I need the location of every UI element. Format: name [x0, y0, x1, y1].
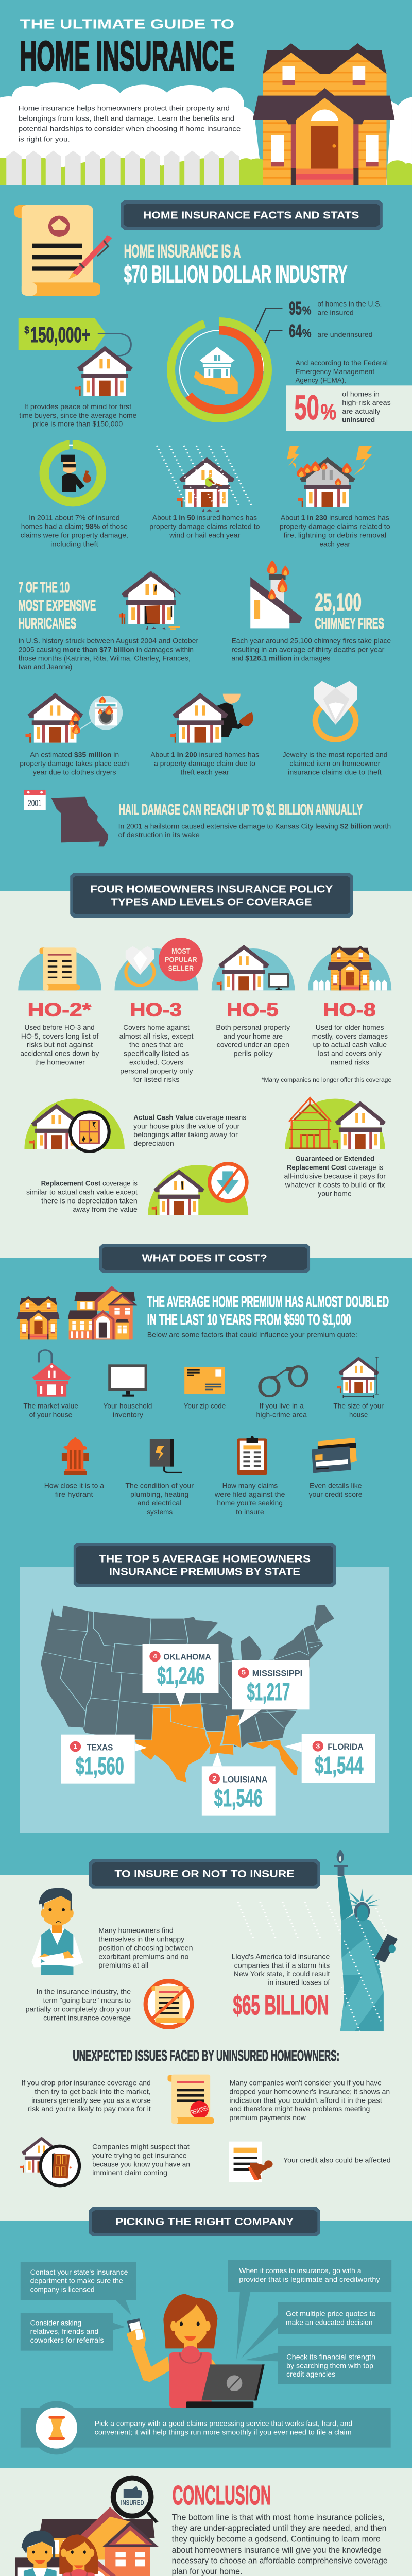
callout: consider asking relatives: Consider asking — [30, 2319, 81, 2327]
text: HO-5 description: Both personal property — [216, 1024, 290, 1031]
icon: guaranteed replacement, frame and finished house — [285, 1097, 386, 1149]
text: hurricanes details: those months (Katrina, Rita, Wilma, Charley, Frances, — [19, 654, 191, 662]
icon: house price tag — [32, 1350, 71, 1397]
caption: house size — [333, 1402, 384, 1418]
text: conclusion body — [172, 2513, 388, 2576]
callout: florida — [284, 1734, 375, 1783]
icon: house with burning dryer — [25, 693, 123, 743]
icon: house with dimensions — [337, 1357, 379, 1398]
text: HO-5 description: covered under an open — [217, 1041, 289, 1049]
fema text — [295, 359, 388, 384]
icon: calendar 2001 — [24, 790, 46, 810]
text: going bare: current insurance coverage — [43, 2014, 131, 2022]
caption: theft claims — [150, 751, 259, 776]
callout: texas: TEXAS — [87, 1743, 113, 1752]
callout: contact state department — [21, 2262, 136, 2315]
price tag and house: $ — [24, 325, 29, 336]
icon: magnifier insured thumbs up — [111, 2476, 157, 2522]
panel: map background — [20, 1567, 389, 1833]
text: lloyds america: Lloyd's America told insurance — [231, 1953, 330, 1960]
text: HO-2 description: HO-5, covers long list of — [21, 1032, 99, 1040]
text: hurricanes details: Ivan and Jeanne) — [19, 663, 72, 671]
caption: high crime: If you live in a — [260, 1402, 304, 1410]
callout: 50% uninsured: of homes in — [342, 390, 380, 398]
text: hurricanes details: 2005 causing more than $77 billion in damages within — [19, 646, 194, 653]
icon: storm dots and statue of liberty — [238, 1850, 398, 2031]
callout: consider asking relatives: relatives, friends and — [30, 2328, 98, 2335]
text: kansas city hailstorm: of destruction in its wake — [118, 831, 200, 839]
text: going bare: partially or completely drop your — [25, 2005, 131, 2013]
callout: financial strength: credit agencies — [286, 2370, 335, 2378]
callout: financial strength — [244, 2346, 391, 2384]
text: HO-2 description — [20, 1024, 99, 1066]
text: HO-3 description: personal property only — [120, 1067, 193, 1075]
icon: HO-3 diamond ring, most popular seller: SELLER — [168, 964, 194, 973]
caption: zip code: Your zip code — [184, 1402, 226, 1410]
icon: electrical panel — [150, 1439, 182, 1472]
icon: handcuffs — [260, 1366, 306, 1396]
icon: monitor — [108, 1364, 147, 1397]
heading: HO-2: HO-2* — [28, 999, 91, 1021]
caption: burglary claims: including theft — [50, 540, 98, 548]
callout: multiple price quotes — [241, 2302, 391, 2359]
callout: mississippi: 5 — [242, 1668, 246, 1676]
callout: 50% uninsured: 50 — [294, 388, 319, 427]
text: HO-3 description — [119, 1024, 194, 1083]
caption: household inventory — [104, 1402, 152, 1418]
text: unhappy position: themselves in the unhappy — [98, 1935, 184, 1943]
icon: credit cards — [312, 1438, 357, 1473]
callout: legitimate provider — [228, 2260, 391, 2360]
callout: mississippi: MISSISSIPPI — [252, 1669, 302, 1679]
text: guaranteed replacement cost: your home — [318, 1190, 352, 1197]
caption: high crime — [256, 1402, 307, 1418]
text: actual cash value: belongings after taking away for — [133, 1131, 238, 1139]
caption: peace of mind: time buyers, since the average home — [19, 412, 136, 419]
icon: rejected scroll — [168, 2075, 214, 2124]
text: unhappy position: Many homeowners find — [98, 1926, 174, 1935]
caption: fire hydrant — [44, 1482, 105, 1498]
text: drop prior insurance: insurers generally see you as a worse — [31, 2096, 151, 2104]
icon: scroll crossed out — [144, 1979, 194, 2029]
text: HO-2 description: the homeowner — [35, 1058, 85, 1066]
stat: 64% underinsured: 64 — [289, 321, 302, 341]
stat: 64% underinsured — [258, 321, 372, 359]
stat: 95% of homes insured: % — [302, 304, 312, 317]
banner: top 5 premiums by state — [74, 1543, 336, 1587]
icon: pair of houses — [16, 1286, 137, 1339]
text: lloyds america: in insured losses of — [268, 1978, 330, 1987]
icon: diamond ring — [313, 681, 358, 742]
caption: market value: The market value — [23, 1402, 78, 1410]
icon: hail-damaged house — [157, 446, 252, 512]
caption: plumbing heating electrical: The condition of your — [125, 1482, 194, 1489]
icon: fire hydrant — [62, 1437, 89, 1475]
text: conclusion body: plan for your home. — [172, 2567, 242, 2576]
text: replacement cost: Replacement Cost coverage is — [41, 1179, 138, 1188]
caption: fire or lightning — [280, 514, 390, 548]
banner: picking the right company — [89, 2207, 320, 2236]
text: HO-3 description: the ones that are — [129, 1041, 184, 1049]
icon: unhappy homeowner — [31, 1888, 83, 1975]
text: HO-5 description — [216, 1024, 290, 1058]
text: HO-2 description: Used before HO-3 and — [24, 1024, 95, 1031]
banner: four homeowners insurance policy types: TYPES AND LEVELS OF COVERAGE — [111, 896, 312, 908]
text: replacement cost — [26, 1179, 138, 1213]
text: HO-3 description: Covers home against — [123, 1024, 190, 1031]
text: lloyds america: companies that if a storm hits — [234, 1961, 330, 1969]
text: suspect imminent claim: imminent claim coming — [92, 2169, 167, 2177]
banner: top 5 premiums by state: INSURANCE PREMIUMS BY STATE — [109, 1566, 300, 1578]
text: chimney details — [231, 637, 391, 662]
caption: jewelry — [282, 751, 388, 776]
text: suspect imminent claim — [92, 2143, 190, 2177]
text: replacement cost: there is no depreciation taken — [41, 1197, 138, 1205]
text: HO-3 description: for listed risks — [133, 1076, 179, 1083]
text: going bare — [25, 1988, 131, 2022]
callout: consider asking relatives: coworkers for referrals — [30, 2336, 104, 2344]
caption: claims filed: were filed against the — [214, 1490, 285, 1498]
callout: oklahoma: 4 — [153, 1652, 157, 1660]
icon: HO-5 house and monitor — [212, 945, 295, 990]
stat: 95% of homes insured — [254, 298, 382, 335]
text: guaranteed replacement cost: Replacement Cost coverage is — [287, 1163, 383, 1172]
banner: picking the right company: PICKING THE RIGHT COMPANY — [115, 2216, 294, 2228]
text: hurricanes details: in U.S. history struck between August 2004 and October — [19, 637, 198, 645]
caption: plumbing heating electrical: and electrical — [137, 1499, 182, 1507]
intro paragraph: Home insurance helps homeowners protect their property and — [19, 104, 230, 112]
text: hurricanes details — [19, 637, 198, 671]
icon: hand holding house — [194, 347, 238, 394]
caption: plumbing heating electrical: systems — [147, 1508, 173, 1516]
caption: credit score: Even details like — [310, 1482, 362, 1489]
caption: theft claims: theft each year — [181, 768, 229, 776]
callout: oklahoma: $1,246 — [157, 1662, 204, 1689]
text: lloyds america — [231, 1953, 330, 1987]
caption: plumbing heating electrical: plumbing, heating — [130, 1490, 188, 1498]
callout: contact state department: company is licensed — [30, 2285, 95, 2294]
price tag and house — [19, 318, 133, 396]
illustration: couple in front of new house — [15, 2507, 159, 2576]
text: replacement cost: away from the value — [73, 1206, 138, 1213]
text: actual cash value: Actual Cash Value coverage means — [133, 1113, 246, 1121]
stat: 64% underinsured: % — [302, 327, 312, 340]
map: highlighted states — [134, 1704, 298, 1783]
text: HURRICANES — [19, 615, 76, 632]
icon: envelope zip code — [184, 1367, 225, 1394]
banner: four homeowners insurance policy types: FOUR HOMEOWNERS INSURANCE POLICY — [90, 884, 333, 895]
banner: what does it cost: WHAT DOES IT COST? — [142, 1252, 267, 1264]
caption: peace of mind: It provides peace of mind for first — [24, 403, 131, 411]
caption: credit score: your credit score — [308, 1490, 363, 1498]
text: actual cash value: your house plus the value of your — [133, 1122, 239, 1130]
text: unhappy position: exorbitant premiums and no — [98, 1953, 188, 1960]
text: HO-3 description: specifically listed as — [124, 1049, 189, 1058]
text: MOST EXPENSIVE — [19, 597, 96, 614]
text: HO-2 description: accidental ones down by — [20, 1049, 99, 1058]
icon: hurricane-damaged house — [119, 568, 186, 630]
text: kansas city hailstorm — [118, 822, 391, 839]
icon: HO-2 scroll in dome — [18, 947, 101, 990]
callout: louisiana — [202, 1753, 276, 1816]
text: HO-2 description: risks but not against — [27, 1041, 93, 1049]
icon: missouri map — [51, 797, 108, 846]
text: unhappy position: position of choosing between — [98, 1944, 193, 1952]
icon: contract scroll with pen — [14, 205, 112, 296]
text: replacement cost: similar to actual cash value except — [26, 1188, 138, 1196]
caption: claims filed: to insure — [236, 1508, 264, 1516]
icon: actual cash value house with cracked window — [24, 1099, 125, 1153]
caption: wind or hail: About 1 in 50 insured homes has — [152, 514, 257, 522]
caption: house size: house — [349, 1411, 368, 1418]
caption: house size: The size of your — [333, 1402, 384, 1410]
map: united states — [41, 1605, 334, 1748]
intro paragraph: belongings from loss, theft and damage. Learn the benefits and — [19, 114, 234, 123]
caption: household inventory: inventory — [113, 1411, 143, 1418]
heading: 7 of the 10 most expensive hurricanes — [19, 579, 96, 632]
icon: replacement cost house with no depreciation sign — [148, 1162, 249, 1215]
caption: wind or hail — [149, 514, 260, 539]
callout: 50% uninsured: uninsured — [342, 416, 375, 424]
text: actual cash value: depreciation — [133, 1140, 174, 1147]
icon: magnifier insured thumbs up: INSURED — [121, 2499, 144, 2507]
caption: claims filed: home you're seeking — [217, 1499, 283, 1507]
caption: peace of mind — [19, 403, 136, 428]
caption: fire or lightning: each year — [319, 540, 350, 548]
text: drop prior insurance: then try to get back into the market, — [35, 2088, 151, 2095]
caption: theft claims: a property damage claim due to — [154, 759, 255, 768]
caption: burglary claims: homes had a claim; 98% of those — [21, 522, 128, 531]
caption: credit score — [308, 1482, 363, 1498]
icon: clipboard — [237, 1436, 267, 1475]
callout: mississippi: $1,217 — [247, 1678, 290, 1705]
caption: burglary claims — [21, 514, 128, 548]
text: HO-8 description — [312, 1024, 388, 1066]
caption: burglary claims: In 2011 about 7% of insured — [29, 514, 120, 522]
callout: 50% uninsured: % — [320, 399, 336, 424]
caption: wind or hail: property damage claims related to — [149, 522, 260, 531]
callout: contact state department: Contact your state's insurance — [30, 2268, 128, 2276]
title: the ultimate guide to: THE ULTIMATE GUIDE TO — [20, 17, 234, 32]
text: chimney details: and $126.1 million in damages — [231, 654, 330, 662]
text: HO-5 description: perils policy — [234, 1049, 273, 1058]
caption: plumbing heating electrical — [125, 1482, 194, 1516]
callout: oklahoma — [143, 1644, 218, 1707]
caption: clothes dryers — [20, 751, 129, 776]
text: drop prior insurance: If you drop prior insurance coverage and — [21, 2079, 151, 2087]
text: actual cash value — [133, 1113, 246, 1147]
icon: HO-3 diamond ring, most popular seller: POPULAR — [165, 956, 197, 964]
caption: wind or hail: wind or hail each year — [169, 531, 240, 539]
icon: house on fire with lightning — [287, 446, 372, 507]
caption: claims filed: How many claims — [222, 1482, 278, 1489]
callout: louisiana: 2 — [212, 1774, 216, 1782]
text: REJECTED — [190, 2105, 210, 2116]
caption: clothes dryers: property damage takes place each — [20, 759, 129, 768]
intro paragraph — [19, 104, 241, 143]
text: lloyds america: New York state, it could result — [234, 1970, 330, 1978]
icon: HO-3 diamond ring, most popular seller: MOST — [171, 947, 191, 956]
callout: mississippi — [232, 1660, 310, 1726]
icon: burglar in ring — [40, 439, 106, 506]
callout: florida: FLORIDA — [328, 1742, 364, 1752]
icon: big orange house — [253, 43, 394, 185]
caption: theft claims: About 1 in 200 insured homes has — [150, 751, 259, 759]
donut chart: insured vs underinsured — [164, 314, 275, 426]
price tag and house: 150,000+ — [30, 323, 90, 347]
icon: house and door under magnifier — [20, 2137, 81, 2187]
banner: home insurance facts and stats — [121, 200, 383, 230]
caption: market value — [23, 1402, 78, 1418]
stat: 64% underinsured: are underinsured — [317, 331, 372, 338]
callout: louisiana: LOUISIANA — [222, 1775, 267, 1784]
intro paragraph: potential hardships to consider when choosing if home insurance — [19, 125, 241, 133]
caption: clothes dryers: An estimated $35 million in — [30, 751, 119, 759]
text: HO-5 description: and your home are — [224, 1032, 283, 1040]
text: unhappy position: premiums at all — [98, 1961, 148, 1969]
callout: texas: $1,560 — [76, 1752, 124, 1780]
text: guaranteed replacement cost — [284, 1155, 386, 1197]
icon: calendar 2001: 2001 — [28, 798, 42, 809]
text: unhappy position — [98, 1926, 193, 1969]
caption: market value: of your house — [29, 1411, 72, 1418]
stat: 95% of homes insured: are insured — [317, 309, 354, 316]
text: going bare: In the insurance industry, the — [36, 1988, 131, 1996]
icon: HO-3 diamond ring, most popular seller — [114, 938, 203, 990]
callout: texas — [61, 1735, 147, 1784]
callout: texas: 1 — [73, 1742, 77, 1750]
icon: credit report with stamp — [229, 2142, 273, 2182]
text: companies won't consider: premium payments now — [229, 2114, 306, 2122]
callout: florida: 3 — [316, 1742, 320, 1750]
text: HO-3 description: excluded. Covers — [129, 1058, 183, 1066]
callout: 50% uninsured: are actually — [342, 408, 380, 415]
heading: average premium doubled — [147, 1294, 389, 1329]
banner: four homeowners insurance policy types — [70, 873, 353, 918]
icon: burglar behind house — [170, 693, 253, 743]
caption: claims filed — [214, 1482, 285, 1516]
caption: fire hydrant: fire hydrant — [55, 1490, 93, 1498]
panel: claims processing with hourglass — [21, 2401, 391, 2454]
callout: consider asking relatives — [21, 2313, 125, 2351]
text: companies won't consider — [229, 2079, 390, 2122]
callout: oklahoma: OKLAHOMA — [163, 1652, 211, 1662]
text: drop prior insurance: risk and you're likely to pay more for it — [28, 2105, 151, 2113]
text: drop prior insurance — [21, 2079, 151, 2113]
text: suspect imminent claim: you're trying to get insurance — [92, 2151, 187, 2159]
callout: 50% uninsured — [286, 385, 412, 431]
caption: peace of mind: price is more than $150,000 — [33, 420, 123, 428]
caption: clothes dryers: year due to clothes dryers — [33, 768, 116, 776]
hero scenery: clouds, bushes, fence — [0, 82, 412, 185]
banner: to insure or not to insure: TO INSURE OR NOT TO INSURE — [114, 1869, 294, 1880]
intro paragraph: is right for you. — [19, 135, 70, 143]
caption: high crime: high-crime area — [256, 1411, 307, 1418]
icon: HO-8 older home with fence — [308, 946, 391, 990]
caption: fire hydrant: How close it is to a — [44, 1482, 105, 1489]
heading: 7 of the 10 most expensive hurricanes: 7 OF THE 10 — [19, 579, 70, 596]
fema text: Agency (FEMA), — [295, 376, 346, 384]
text: suspect imminent claim: Companies might suspect that — [92, 2143, 190, 2151]
text: going bare: term "going bare" means to — [43, 1996, 131, 2005]
text: HO-8 description: named risks — [331, 1058, 369, 1066]
text: suspect imminent claim: because you know you have an — [92, 2160, 190, 2168]
callout: contact state department: department to make sure the — [30, 2277, 123, 2285]
heading: 25,100 chimney fires — [315, 588, 384, 632]
caption: burglary claims: claims were for property damage, — [21, 531, 128, 539]
heading: HO-8: HO-8 — [323, 999, 376, 1021]
heading: HO-3: HO-3 — [130, 999, 182, 1021]
caption: household inventory: Your household — [104, 1402, 152, 1410]
icon: chimney fire — [250, 560, 302, 628]
heading: HO-5: HO-5 — [227, 999, 279, 1021]
banner: to insure or not to insure — [89, 1859, 320, 1889]
text: HO-3 description: almost all risks, except — [119, 1032, 194, 1040]
banner: top 5 premiums by state: THE TOP 5 AVERAGE HOMEOWNERS — [99, 1553, 311, 1565]
icon: woman with phone and laptop — [127, 2294, 265, 2408]
callout: louisiana: $1,546 — [214, 1784, 263, 1811]
banner: what does it cost — [99, 1244, 310, 1273]
heading: home insurance is a $70 billion dollar industry — [124, 241, 347, 288]
stat: 95% of homes insured: 95 — [289, 298, 302, 318]
